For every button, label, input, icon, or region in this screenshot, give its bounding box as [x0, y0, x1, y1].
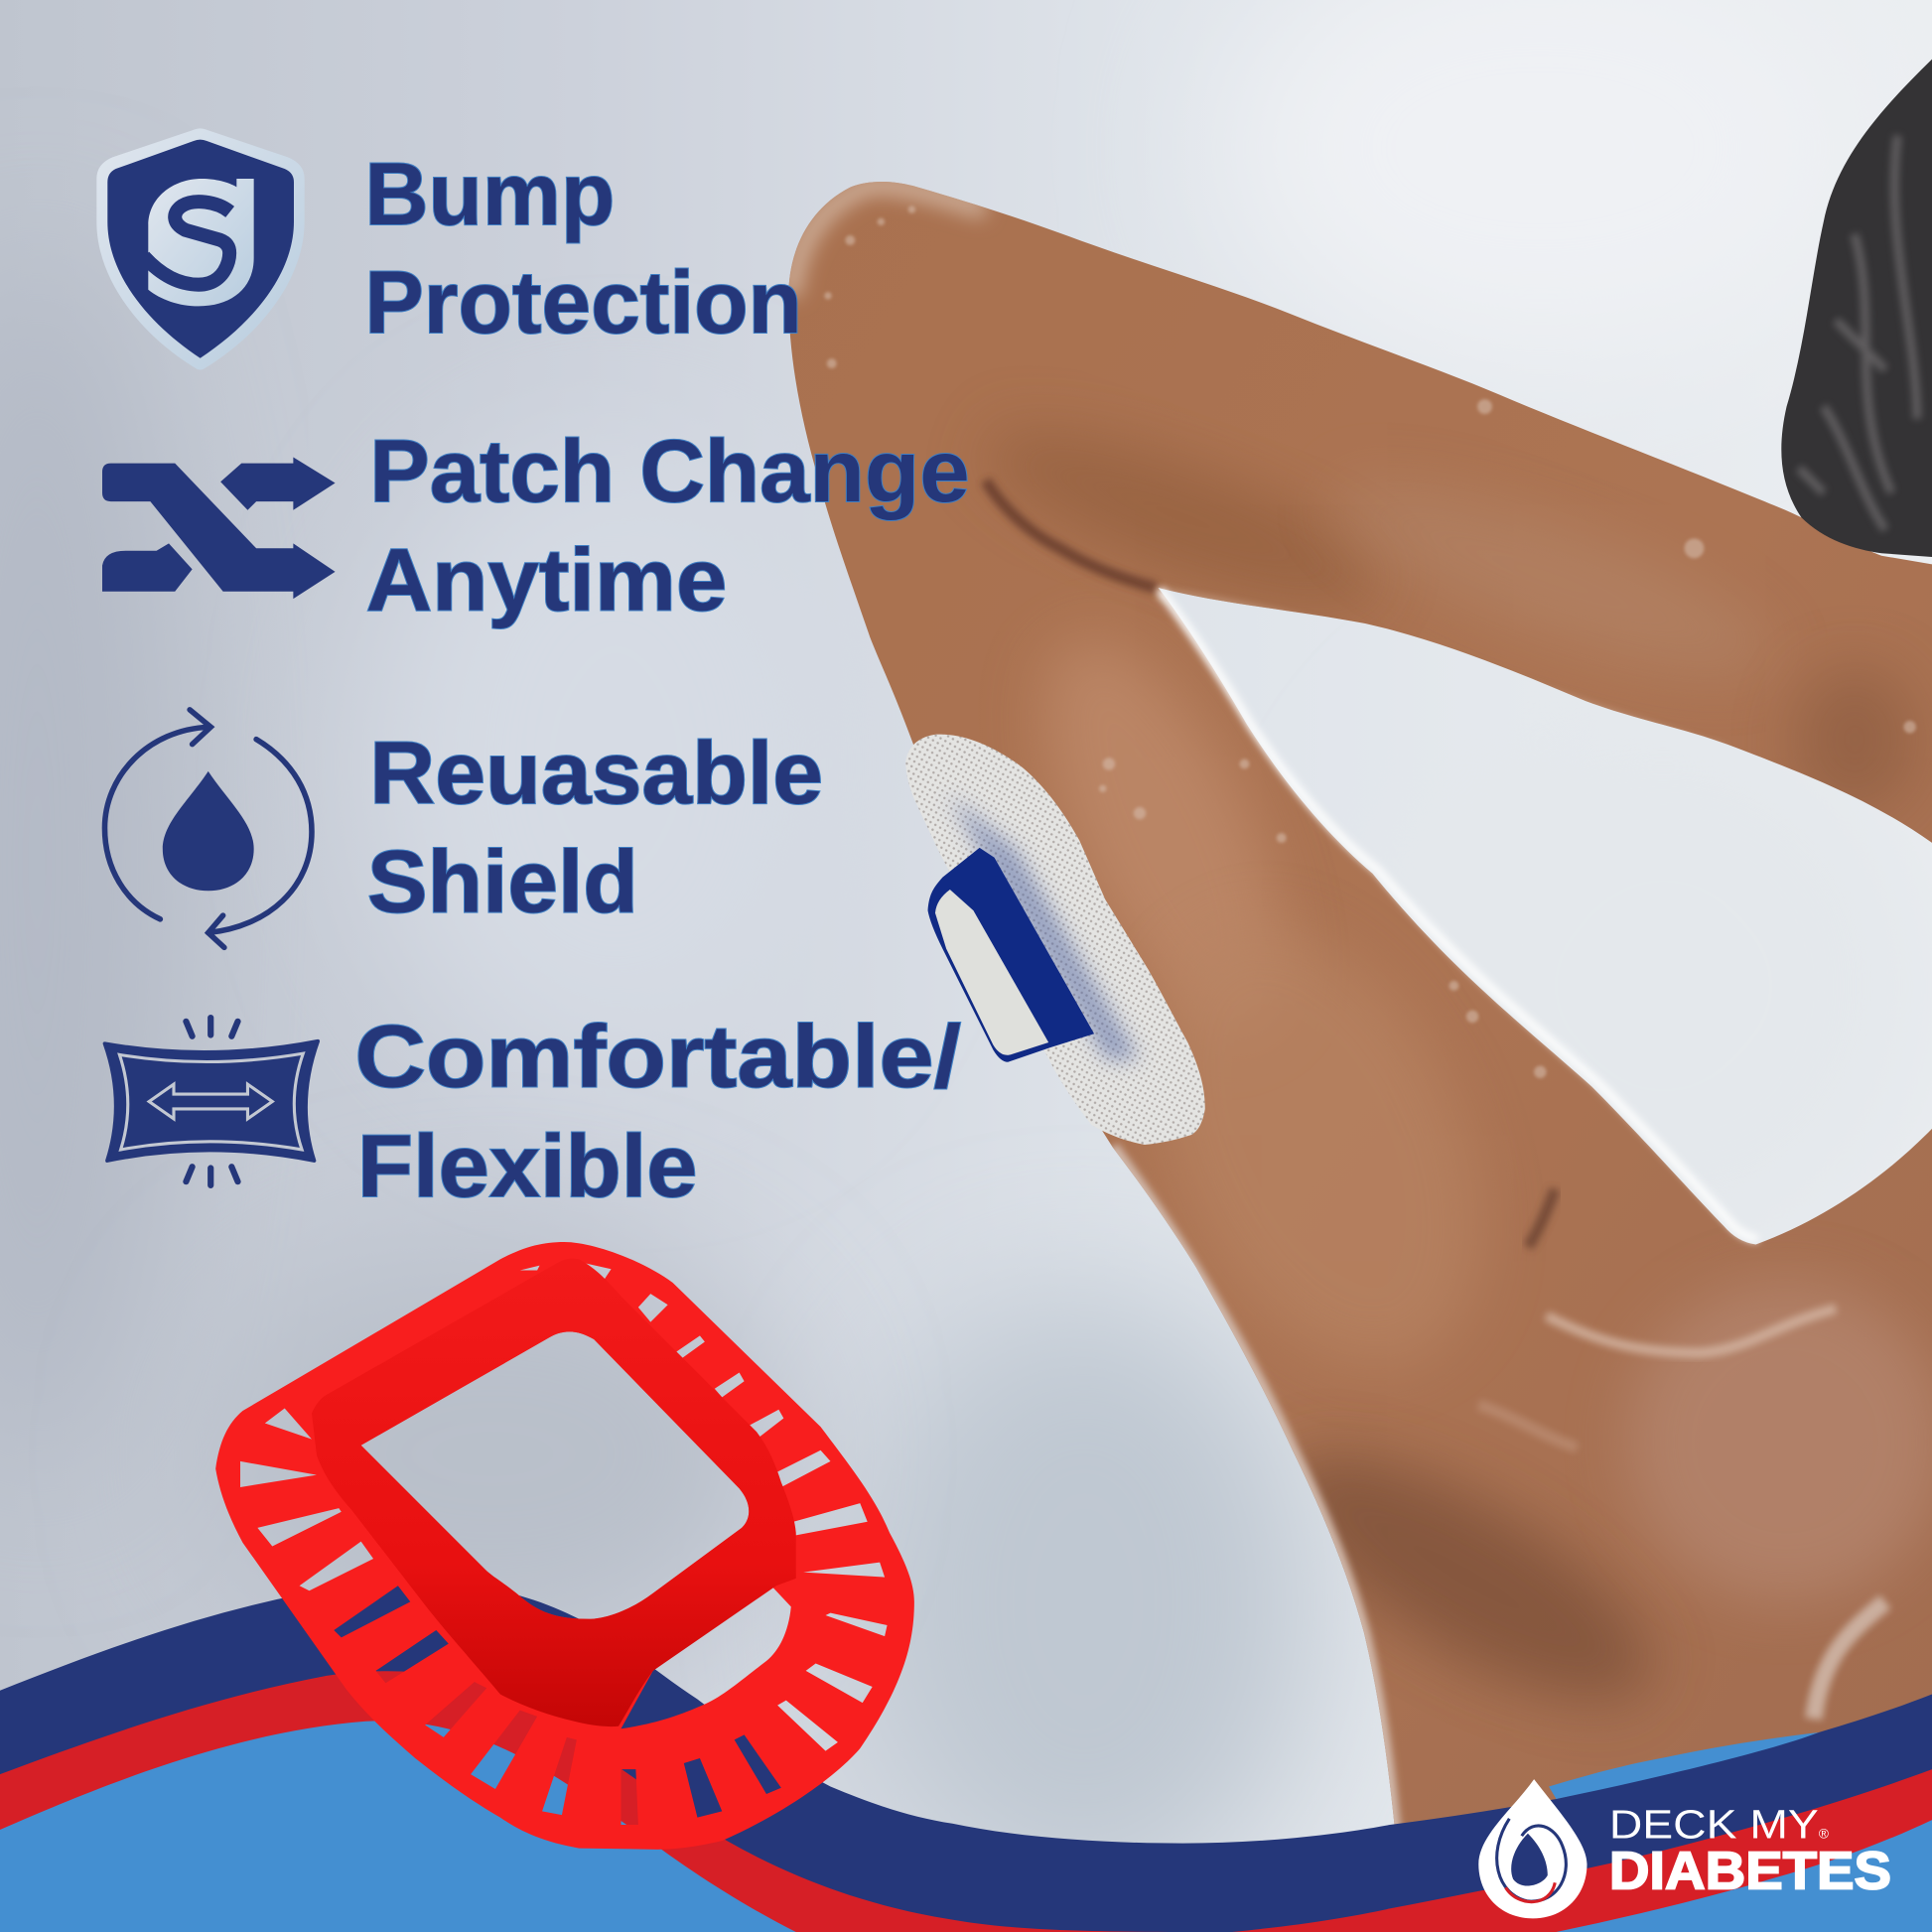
- heading: bump protection: Bump: [364, 144, 615, 243]
- heading: reusable shield: Reuasable: [369, 723, 823, 822]
- heading: patch change anytime: Patch Change: [369, 421, 970, 520]
- heading: patch change anytime: Anytime: [366, 529, 727, 628]
- icon: crossing arrows: [102, 457, 336, 599]
- feature: comfortable flexible: [104, 1007, 961, 1215]
- adhesive patch on arm: [905, 735, 1205, 1145]
- icon: logo drop: [1478, 1779, 1587, 1918]
- wet highlight along arm edge: [1162, 593, 1754, 1238]
- heading: reusable shield: [367, 723, 823, 930]
- heading: comfortable flexible: Comfortable/: [354, 1007, 961, 1106]
- heading: bump protection: Protection: [364, 252, 802, 351]
- icon: shield with S: [96, 128, 305, 370]
- icon: stretching pillow: [104, 1018, 318, 1185]
- heading: comfortable flexible: Flexible: [357, 1116, 697, 1215]
- logo text: deck my: DECK MY: [1609, 1802, 1819, 1848]
- photo: dark hair: [1781, 60, 1932, 557]
- feature: patch change anytime: [102, 421, 970, 628]
- heading: patch change anytime: [366, 421, 970, 628]
- photo: arm and torso: [788, 182, 1932, 1932]
- logo text: diabetes: DIABETES: [1609, 1843, 1891, 1901]
- heading: comfortable flexible: [354, 1007, 961, 1215]
- wave band: navy, red and blue: [0, 1584, 1932, 1932]
- heading: reusable shield: Shield: [367, 831, 638, 930]
- raised collar of shield: [312, 1259, 796, 1726]
- logo: deck my diabetes: [1478, 1779, 1891, 1918]
- icon: recycle arrows around drop: [104, 710, 312, 947]
- sensor with blue shield: [928, 848, 1094, 1062]
- red 3D printed shield product: [215, 1242, 914, 1850]
- feature: bump protection: [96, 128, 802, 370]
- water droplets on skin: [824, 206, 1916, 1078]
- registered mark: ®: [1819, 1827, 1829, 1842]
- heading: bump protection: [364, 144, 802, 351]
- feature: reusable shield: [104, 710, 823, 947]
